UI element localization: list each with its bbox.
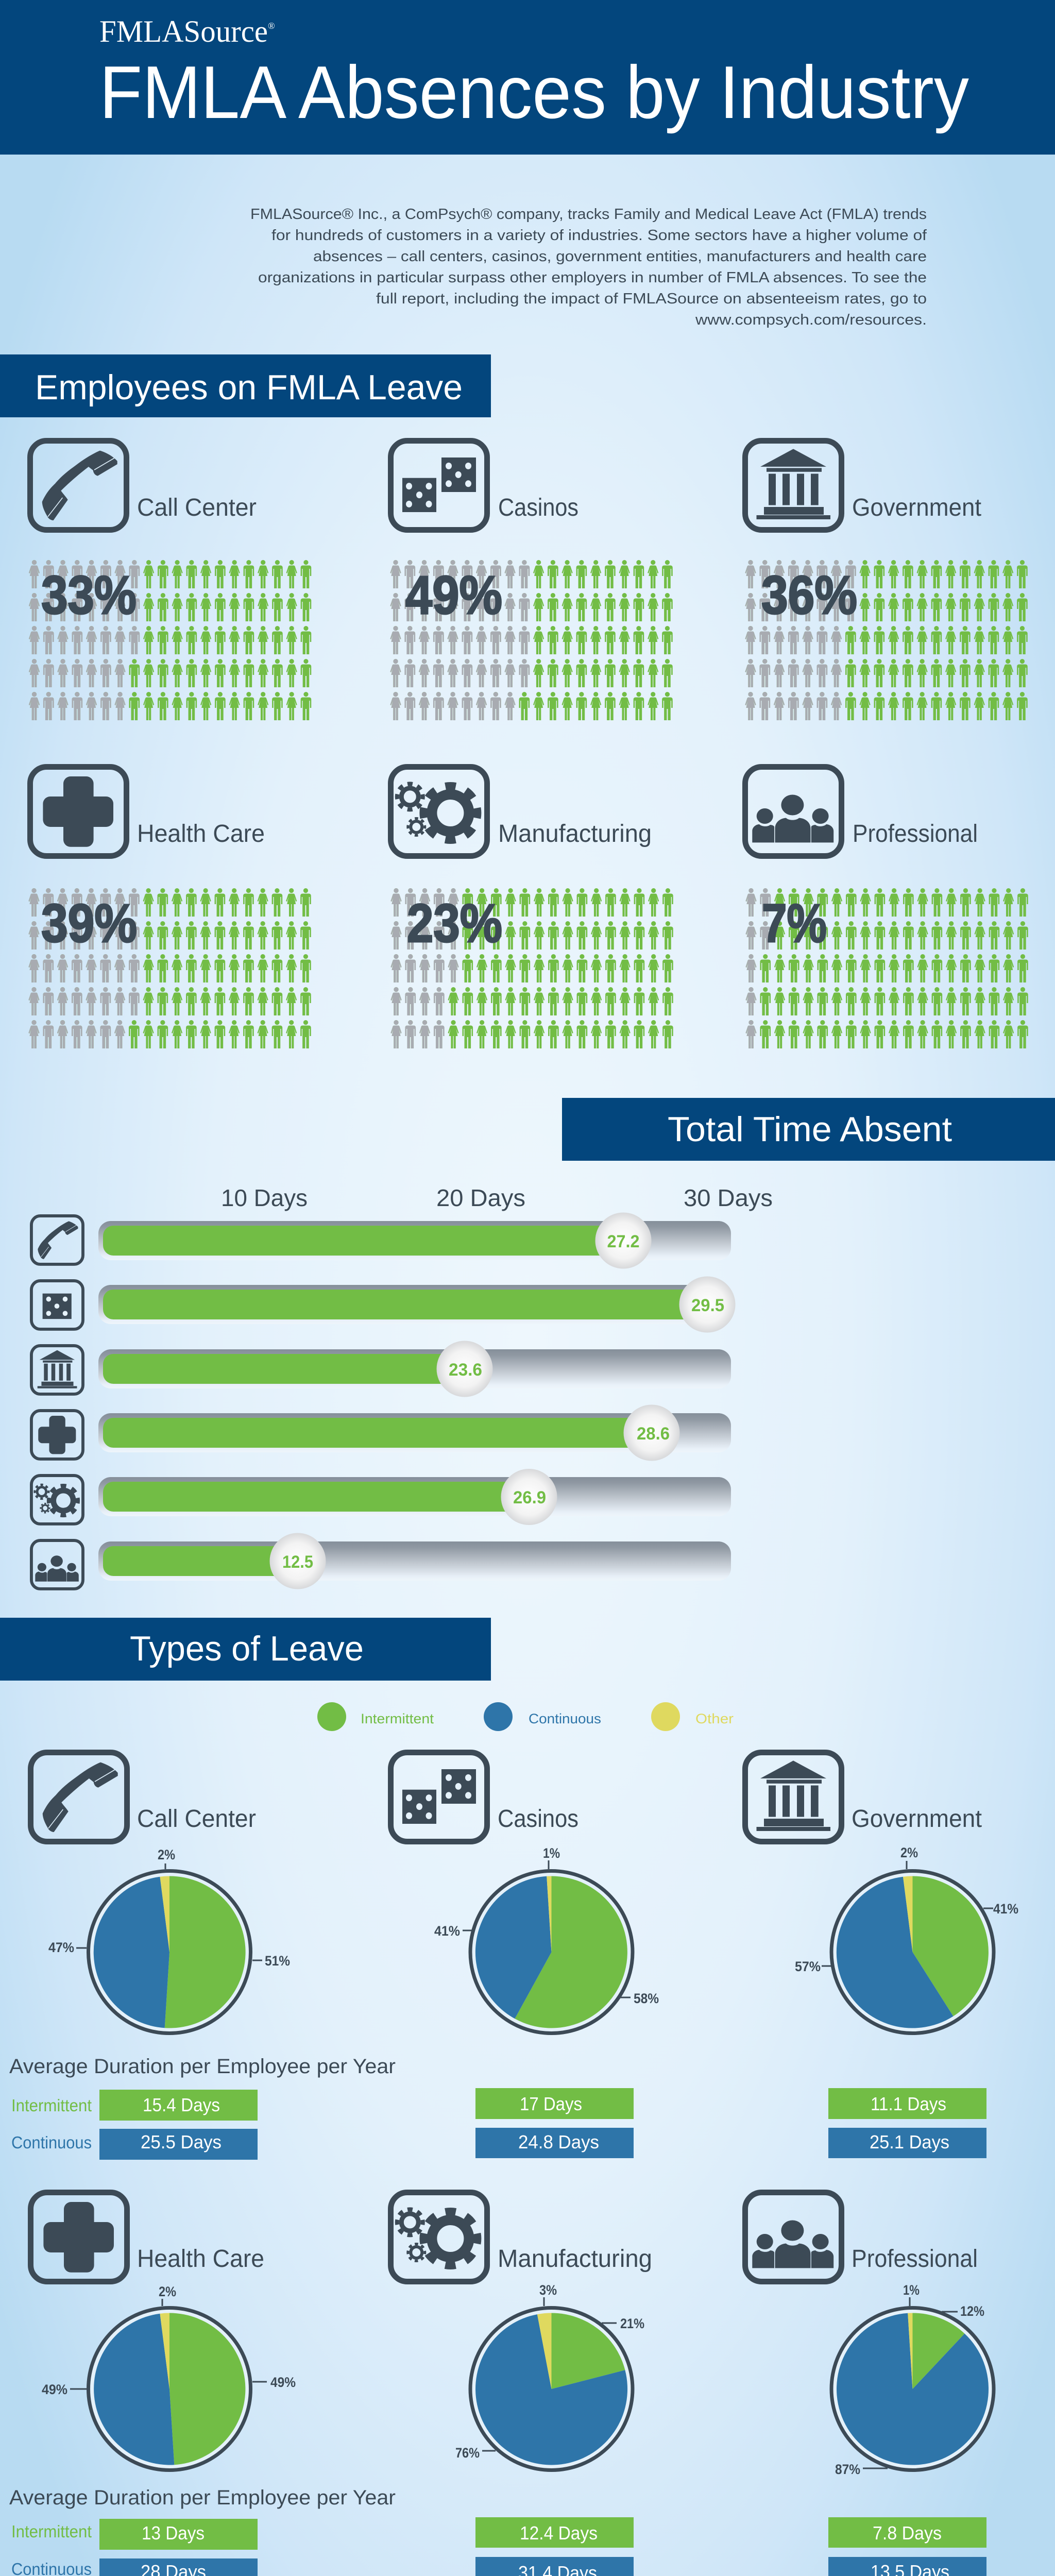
axis labels: 30 Days bbox=[684, 1184, 773, 1211]
panel: types of leave, Health Care bbox=[31, 2193, 296, 2470]
pie chart: Casinos: 41% bbox=[434, 1923, 460, 1939]
pie chart: Call Center bbox=[48, 1847, 290, 2033]
pie chart: Call Center: 2% bbox=[158, 1847, 175, 1862]
pictogram: 39 percent bbox=[28, 888, 311, 1048]
duration: Professional bbox=[828, 2517, 986, 2576]
pie chart: Government bbox=[795, 1845, 1018, 2033]
panel: employees on leave, Casinos bbox=[390, 441, 673, 720]
panel: employees on leave, Call Center bbox=[29, 441, 311, 720]
bar: Casinos 29.5 bbox=[31, 1277, 735, 1332]
pictogram: 49 percent bbox=[390, 560, 673, 720]
bar: Professional 12.5 bbox=[31, 1533, 731, 1589]
row labels: Intermittent and Continuous: Continuous bbox=[11, 2133, 92, 2152]
bar: Casinos 29.5: 29.5 bbox=[691, 1296, 724, 1315]
icon: gears bbox=[390, 767, 487, 856]
icon: people bbox=[745, 2193, 842, 2281]
section heading: Total Time Absent bbox=[562, 1098, 1055, 1161]
icon: dice bbox=[390, 441, 487, 530]
intro text block: absences – call centers, casinos, government entities, manufacturers and health care bbox=[313, 248, 927, 265]
label: Casinos: Casinos bbox=[498, 494, 578, 521]
pie chart: Health Care: 2% bbox=[159, 2284, 176, 2299]
panel: types of leave, Government bbox=[745, 1753, 1018, 2033]
row labels: Intermittent and Continuous bbox=[11, 2522, 92, 2576]
duration: Call Center: 25.5 Days bbox=[141, 2131, 222, 2153]
label: Health Care: Health Care bbox=[137, 2245, 264, 2273]
label: Manufacturing: Manufacturing bbox=[498, 2245, 652, 2273]
icon: medical cross bbox=[30, 767, 127, 856]
bar: Manufacturing 26.9 bbox=[31, 1469, 731, 1525]
panel: types of leave, Call Center bbox=[31, 1753, 290, 2033]
pie chart: Health Care bbox=[42, 2284, 296, 2470]
label: Casinos: Casinos bbox=[498, 1805, 578, 1833]
pie chart: Manufacturing: 21% bbox=[620, 2316, 644, 2331]
intro text block: www.compsych.com/resources. bbox=[695, 312, 927, 328]
pie chart: Casinos: 58% bbox=[634, 1991, 659, 2006]
label: Health Care: Health Care bbox=[137, 820, 265, 848]
header banner bbox=[0, 0, 1055, 155]
duration: Health Care: 13 Days bbox=[142, 2522, 205, 2544]
pie chart: Health Care: 49% bbox=[42, 2382, 67, 2397]
bar: Manufacturing 26.9: 26.9 bbox=[513, 1488, 546, 1507]
duration: Casinos bbox=[475, 2088, 634, 2158]
bar: Professional 12.5: 12.5 bbox=[282, 1552, 313, 1572]
label: Professional: Professional bbox=[853, 820, 978, 848]
bar: Health Care 28.6 bbox=[31, 1404, 731, 1461]
duration: Casinos: 24.8 Days bbox=[518, 2131, 599, 2153]
icon: government building bbox=[745, 1753, 842, 1841]
legend bbox=[317, 1702, 734, 1731]
panel: types of leave, Casinos bbox=[390, 1753, 659, 2033]
percent: 23%: 23% bbox=[407, 893, 502, 954]
label: Call Center: Call Center bbox=[137, 1805, 256, 1833]
percent: 36%: 36% bbox=[761, 565, 857, 625]
panel: types of leave, Manufacturing bbox=[390, 2193, 652, 2470]
percent: 49%: 49% bbox=[405, 565, 502, 625]
icon: telephone bbox=[31, 1753, 127, 1841]
label: Government: Government bbox=[852, 1805, 982, 1833]
pie chart: Manufacturing bbox=[455, 2282, 644, 2470]
bar: Call Center 27.2: 27.2 bbox=[607, 1232, 640, 1251]
duration: Health Care bbox=[99, 2519, 258, 2576]
duration: Professional: 7.8 Days bbox=[873, 2522, 942, 2544]
pie chart: Professional bbox=[831, 2282, 994, 2477]
icon: telephone bbox=[30, 441, 127, 530]
pie chart: Professional: 12% bbox=[960, 2303, 984, 2319]
axis labels: 20 Days bbox=[436, 1184, 525, 1211]
pictogram: 7 percent bbox=[745, 888, 1028, 1048]
heading: average duration, first row: Average Duration per Employee per Year bbox=[9, 2055, 396, 2078]
pictogram: 33 percent bbox=[29, 560, 311, 720]
intro text block: for hundreds of customers in a variety of industries. Some sectors have a higher volume of bbox=[271, 227, 927, 244]
pie chart: Manufacturing: 3% bbox=[539, 2282, 557, 2298]
label: Professional: Professional bbox=[852, 2245, 978, 2273]
panel: employees on leave, Government bbox=[745, 441, 1028, 720]
pie chart: Government: 57% bbox=[795, 1959, 821, 1974]
pie chart: Professional: 87% bbox=[835, 2462, 860, 2477]
bar chart: total time absent bbox=[31, 1184, 773, 1589]
pie chart: Call Center: 51% bbox=[265, 1953, 290, 1969]
axis labels bbox=[221, 1184, 773, 1211]
percent: 7%: 7% bbox=[762, 893, 827, 954]
section heading: Total Time Absent: Total Time Absent bbox=[668, 1110, 952, 1149]
section heading: Employees on FMLA Leave: Employees on FMLA Leave bbox=[35, 368, 463, 407]
intro text block: FMLASource® Inc., a ComPsych® company, tracks Family and Medical Leave Act (FMLA) trends bbox=[250, 206, 927, 223]
percent: 39%: 39% bbox=[41, 893, 137, 954]
duration: Government bbox=[828, 2088, 986, 2158]
legend: Other bbox=[695, 1711, 734, 1726]
heading: average duration, second row: Average Duration per Employee per Year bbox=[9, 2486, 396, 2509]
duration: Government: 11.1 Days bbox=[871, 2093, 946, 2114]
section heading: Employees on FMLA Leave bbox=[0, 354, 491, 417]
pie chart: Manufacturing: 76% bbox=[455, 2445, 480, 2461]
pie chart: Call Center: 47% bbox=[48, 1940, 74, 1955]
section heading: Types of Leave bbox=[0, 1618, 491, 1681]
icon: government building bbox=[745, 441, 842, 530]
label: Government: Government bbox=[852, 494, 981, 521]
pictogram: 23 percent bbox=[390, 888, 673, 1048]
icon: gears bbox=[390, 2193, 487, 2281]
axis labels: 10 Days bbox=[221, 1184, 308, 1211]
pie chart: Government: 2% bbox=[900, 1845, 918, 1860]
logo: FMLASource: ® bbox=[268, 21, 275, 31]
pie chart: Professional: 1% bbox=[903, 2282, 920, 2298]
intro text block: full report, including the impact of FMLASource on absenteeism rates, go to bbox=[376, 291, 927, 307]
title: FMLA Absences by Industry bbox=[99, 50, 969, 134]
logo: FMLASource: FMLASource bbox=[99, 14, 268, 48]
section heading: Types of Leave: Types of Leave bbox=[130, 1629, 364, 1668]
bar: Government 23.6: 23.6 bbox=[449, 1360, 482, 1380]
label: Manufacturing: Manufacturing bbox=[498, 820, 652, 848]
intro text block: organizations in particular surpass other employers in number of FMLA absences. To see the bbox=[258, 269, 927, 286]
panel: employees on leave, Manufacturing bbox=[390, 767, 673, 1048]
pie chart: Casinos: 1% bbox=[543, 1845, 560, 1861]
pictogram: 36 percent bbox=[745, 560, 1028, 720]
row labels: Intermittent and Continuous: Intermittent bbox=[11, 2096, 92, 2115]
row labels: Intermittent and Continuous: Intermittent bbox=[11, 2522, 92, 2541]
legend: Intermittent bbox=[361, 1711, 434, 1726]
panel: types of leave, Professional bbox=[745, 2193, 994, 2477]
percent: 33%: 33% bbox=[41, 565, 137, 625]
icon: people bbox=[745, 767, 842, 856]
duration: Call Center bbox=[99, 2090, 258, 2160]
duration: Manufacturing: 12.4 Days bbox=[520, 2522, 598, 2544]
intro text block bbox=[250, 206, 927, 328]
icon: medical cross bbox=[31, 2193, 127, 2281]
icon: dice bbox=[390, 1753, 487, 1841]
bar: Health Care 28.6: 28.6 bbox=[637, 1424, 670, 1444]
duration: Government: 25.1 Days bbox=[870, 2131, 949, 2153]
panel: employees on leave, Professional bbox=[745, 767, 1028, 1048]
row labels: Intermittent and Continuous bbox=[11, 2096, 92, 2152]
duration: Manufacturing bbox=[475, 2517, 634, 2576]
panel: employees on leave, Health Care bbox=[28, 767, 311, 1048]
pie chart: Health Care: 49% bbox=[270, 2375, 296, 2390]
legend: Continuous bbox=[529, 1711, 601, 1726]
bar: Call Center 27.2 bbox=[31, 1213, 731, 1268]
duration: Call Center: 15.4 Days bbox=[143, 2094, 220, 2115]
pie chart: Casinos bbox=[434, 1845, 659, 2033]
bar: Government 23.6 bbox=[31, 1341, 731, 1397]
label: Call Center: Call Center bbox=[137, 494, 257, 521]
duration: Casinos: 17 Days bbox=[520, 2093, 582, 2114]
pie chart: Government: 41% bbox=[993, 1901, 1018, 1917]
